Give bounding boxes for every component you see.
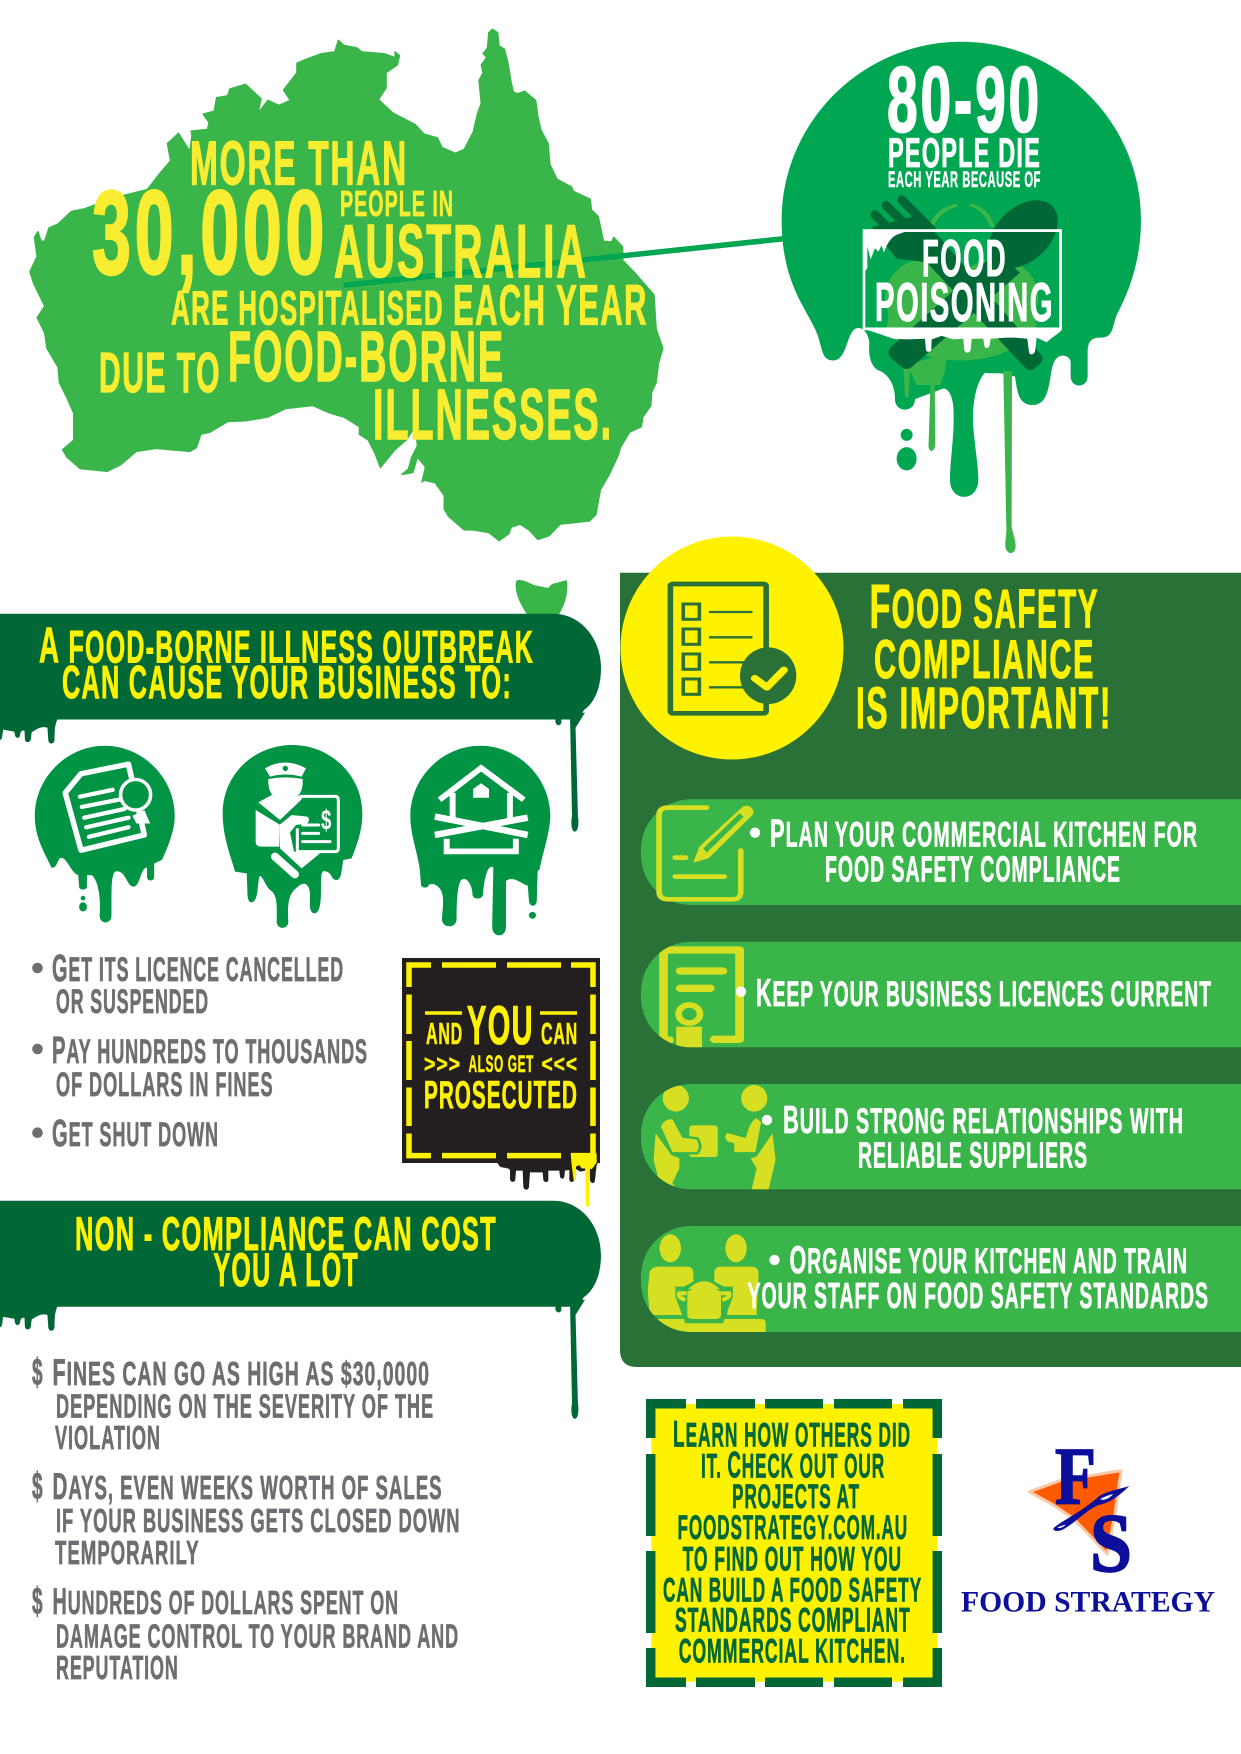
panel heading [856, 572, 1112, 741]
icon: two cooks and a pot [644, 1234, 766, 1333]
bullet: licence: GET ITS LICENCE CANCELLED [52, 948, 344, 990]
icon: two people exchanging goods [654, 1085, 776, 1190]
connector line to death statistic [346, 238, 786, 285]
text: 80-90 people die: EACH YEAR BECAUSE OF [888, 167, 1041, 192]
item: plan kitchen [641, 799, 1241, 905]
logo orange mark [1029, 1471, 1121, 1554]
Tasmania shape [516, 580, 567, 616]
text: 80-90 people die: POISONING [875, 271, 1054, 333]
icon: officer issuing a fine [223, 745, 362, 928]
logo letter F: F [1055, 1430, 1096, 1522]
cost item: fines: $ [32, 1352, 44, 1394]
bullet: shut down [33, 1113, 219, 1155]
icon: notepad and pencil [659, 806, 754, 899]
panel: outbreak heading banner [0, 614, 601, 832]
banner heading text: A FOOD-BORNE ILLNESS OUTBREAK [39, 618, 534, 674]
cost item: fines: VIOLATION [55, 1420, 161, 1457]
item: suppliers [641, 1084, 1241, 1190]
callout: learn how others did it [651, 1404, 937, 1682]
bullet: fines: PAY HUNDREDS TO THOUSANDS [52, 1030, 368, 1072]
map statistic text: ARE HOSPITALISED [171, 282, 444, 336]
item: organise and train [641, 1226, 1241, 1333]
Australia mainland shape [30, 29, 663, 541]
cost item: brand damage: REPUTATION [56, 1650, 179, 1687]
icon: licence certificate [35, 746, 175, 922]
callout: you can also get prosecuted: AND [426, 1016, 463, 1051]
cost item: sales: $ [32, 1466, 44, 1508]
map of Australia with statistic [30, 29, 786, 616]
callout: you can also get prosecuted: CAN [541, 1016, 578, 1051]
text block: cost list [32, 1352, 460, 1687]
callout: learn how others did it: CAN BUILD A FOOD SAFETY [663, 1572, 922, 1610]
dashed yellow border [409, 965, 593, 1156]
map statistic text: EACH YEAR [453, 274, 648, 338]
cost item: sales: DAYS, EVEN WEEKS WORTH OF SALES [52, 1466, 442, 1507]
cost item: brand damage: DAMAGE CONTROL TO YOUR BRAND AND [56, 1619, 459, 1656]
callout: you can also get prosecuted: PROSECUTED [424, 1074, 578, 1117]
map statistic text: DUE TO [99, 341, 221, 405]
dashed green border [651, 1404, 937, 1682]
biohazard symbol [885, 203, 1038, 553]
bullet: fines: OF DOLLARS IN FINES [56, 1066, 274, 1104]
cost item: brand damage [32, 1581, 459, 1687]
icon: yellow checklist badge [620, 536, 844, 760]
bullet: licence [33, 948, 344, 1021]
callout: learn how others did it: STANDARDS COMPLIANT [675, 1602, 911, 1640]
callout: learn how others did it: LEARN HOW OTHERS DID [673, 1414, 911, 1455]
text: 80-90 people die: 80-90 [887, 48, 1042, 152]
cost item: sales [32, 1466, 460, 1572]
banner heading text: CAN CAUSE YOUR BUSINESS TO: [62, 656, 512, 708]
logo: Food Strategy [961, 1430, 1215, 1619]
logo spoon [1053, 1486, 1129, 1531]
cost item: fines: FINES CAN GO AS HIGH AS $30,0000 [52, 1352, 430, 1393]
banner paint drips [0, 712, 585, 832]
banner heading text [39, 618, 534, 708]
bullet: licence: OR SUSPENDED [56, 983, 209, 1021]
callout: you can also get prosecuted: >>> [424, 1051, 461, 1078]
cost item: brand damage: $ [32, 1581, 44, 1623]
map statistic text: PEOPLE IN [340, 183, 454, 224]
map statistic text: AUSTRALIA [334, 210, 588, 294]
banner heading text: YOU A LOT [214, 1244, 359, 1297]
callout: learn how others did it: FOODSTRATEGY.COM.AU [678, 1509, 908, 1547]
text: 80-90 people die [875, 48, 1054, 333]
map statistic text: 30,000 [92, 167, 328, 300]
icon: officer issuing a fine: $ [321, 804, 332, 835]
cost item: fines: DEPENDING ON THE SEVERITY OF THE [56, 1389, 434, 1426]
callout: learn how others did it: COMMERCIAL KITCHEN. [679, 1633, 906, 1671]
cost item: sales: TEMPORARILY [55, 1535, 200, 1572]
icon: closed down building [410, 746, 550, 935]
crossed fork and spoon [872, 187, 1070, 370]
map statistic text: ILLNESSES. [373, 376, 613, 455]
panel: food poisoning deaths blob [782, 42, 1141, 553]
white food poisoning frame [864, 231, 1061, 329]
item: licences [641, 942, 1241, 1048]
icons: consequences row [35, 745, 550, 935]
panel: non-compliance heading banner [0, 1201, 601, 1419]
dripping blob graphic [782, 42, 1141, 553]
banner paint drips [0, 1300, 585, 1419]
bullet: fines [33, 1030, 368, 1104]
cost item: fines [32, 1352, 434, 1457]
logo letter S: S [1090, 1497, 1132, 1590]
logo wordmark: FOOD STRATEGY [961, 1586, 1215, 1619]
map statistic text [92, 128, 648, 455]
banner heading text [75, 1208, 497, 1297]
cost item: sales: IF YOUR BUSINESS GETS CLOSED DOWN [56, 1503, 460, 1540]
text block: consequences list [33, 948, 368, 1155]
cost item: brand damage: HUNDREDS OF DOLLARS SPENT ON [52, 1581, 399, 1622]
banner heading text: NON - COMPLIANCE CAN COST [75, 1208, 497, 1261]
map statistic text: MORE THAN [190, 128, 408, 198]
text: 80-90 people die: FOOD [922, 230, 1007, 288]
callout: learn how others did it: IT. CHECK OUT OUR [701, 1445, 885, 1486]
text: 80-90 people die: PEOPLE DIE [888, 129, 1041, 176]
panel: food safety compliance [620, 536, 1241, 1367]
bullet: shut down: GET SHUT DOWN [52, 1113, 219, 1155]
paint drips under callout [495, 1160, 600, 1190]
callout: you can also get prosecuted: ALSO GET [468, 1051, 534, 1078]
map statistic text: FOOD-BORNE [228, 318, 505, 397]
callout: you can also get prosecuted [402, 958, 600, 1207]
callout: learn how others did it: PROJECTS AT [732, 1478, 860, 1516]
callout: you can also get prosecuted: YOU [467, 994, 534, 1056]
callout: learn how others did it: TO FIND OUT HOW YOU [683, 1541, 902, 1579]
yellow paint drip [571, 1153, 597, 1207]
callout: you can also get prosecuted: <<< [542, 1051, 578, 1078]
icon: licence document [664, 950, 740, 1048]
